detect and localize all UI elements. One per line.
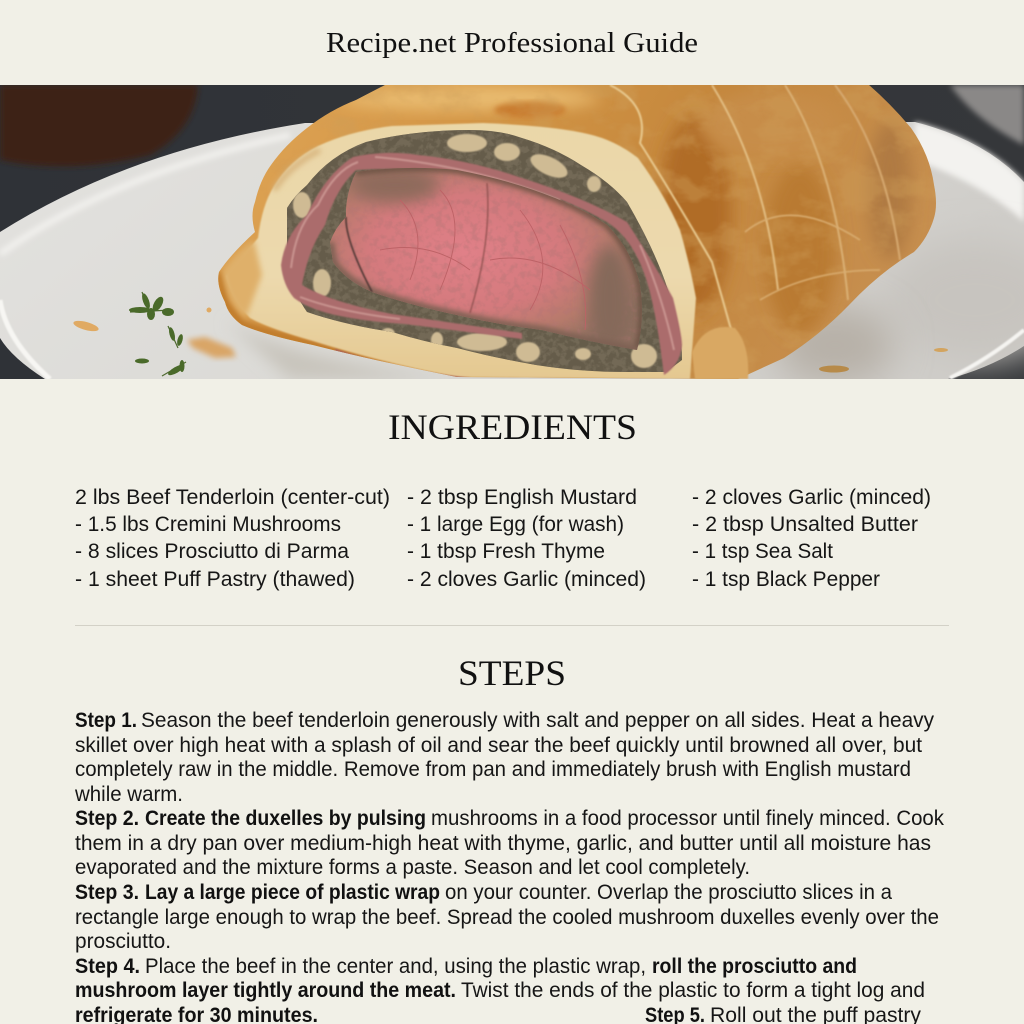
steps heading: STEPS (458, 653, 566, 693)
title: Recipe.net Professional Guide (326, 27, 698, 59)
ingredients column 2: - 1 tbsp Fresh Thyme (407, 540, 605, 563)
ingredients heading: INGREDIENTS (388, 407, 637, 447)
step 1 (74, 709, 934, 806)
ingredients column 3: - 2 cloves Garlic (minced) (692, 486, 931, 509)
step 2 (75, 807, 944, 879)
thyme sprigs (129, 292, 186, 377)
step 2: mushrooms in a food processor until finely minced. Cook (431, 807, 944, 830)
ingredients list (75, 486, 931, 591)
ingredients column 3: - 1 tsp Black Pepper (692, 568, 880, 591)
ingredients column 2: - 1 large Egg (for wash) (407, 513, 624, 536)
step 1: Step 1. (75, 709, 137, 732)
dark table background (0, 85, 1024, 379)
step 4: Place the beef in the center and, using the plastic wrap, (145, 955, 646, 978)
steps text block (74, 709, 944, 1024)
ingredients column 2 (407, 486, 646, 591)
step 4: mushroom layer tightly around the meat. (75, 979, 456, 1002)
step 1: while warm. (74, 783, 183, 806)
ingredients column 1: 2 lbs Beef Tenderloin (center-cut) (75, 486, 390, 509)
dark seep line along base (335, 350, 470, 379)
pale arch shading (274, 150, 320, 190)
step 3: on your counter. Overlap the prosciutto slices in a (445, 881, 892, 904)
ingredients column 1 (75, 486, 390, 591)
step 4 (75, 955, 925, 1024)
pastry shadow on plate (244, 332, 398, 379)
hero photo: sliced beef wellington on a white plate (0, 85, 1024, 385)
step 1: skillet over high heat with a splash of oil and sear the beef quickly until browned all over, but (75, 734, 922, 757)
ingredients column 3 (692, 486, 931, 591)
ingredients column 3: - 2 tbsp Unsalted Butter (692, 513, 918, 536)
step 2: Create the duxelles by pulsing (145, 807, 426, 830)
pastry crumbs (72, 308, 948, 372)
beef tenderloin slice (325, 165, 645, 355)
step 4: Step 4. (75, 955, 140, 978)
ingredients column 1: - 1 sheet Puff Pastry (thawed) (75, 568, 355, 591)
step 2: Step 2. (75, 807, 139, 830)
prosciutto wrap (281, 153, 682, 375)
golden shading at left tip (222, 240, 262, 318)
step 3: rectangle large enough to wrap the beef. Spread the cooled mushroom duxelles evenly over the (75, 906, 939, 929)
ingredients column 3: - 1 tsp Sea Salt (692, 540, 833, 563)
mushroom duxelles layer (280, 125, 690, 380)
plate (0, 122, 1024, 385)
cut face dough (222, 123, 696, 379)
ingredients column 2: - 2 cloves Garlic (minced) (407, 568, 646, 591)
ingredients column 2: - 2 tbsp English Mustard (407, 486, 637, 509)
ingredients column 1: - 8 slices Prosciutto di Parma (75, 540, 349, 563)
step 3 (75, 881, 939, 953)
flaky crust at lower right of cut (692, 327, 748, 379)
step 1: Season the beef tenderloin generously with salt and pepper on all sides. Heat a heavy (141, 709, 934, 732)
step 4: Twist the ends of the plastic to form a tight log and (461, 979, 925, 1002)
mushroom pieces (293, 134, 657, 368)
step 2: evaporated and the mixture forms a paste. Season and let cool completely. (75, 856, 750, 879)
step 3: prosciutto. (75, 930, 171, 953)
step 1: completely raw in the middle. Remove from pan and immediately brush with English mustard (75, 758, 911, 781)
pastry crust (210, 85, 950, 379)
blurred wooden bowl (0, 85, 198, 166)
step 4: roll the prosciutto and (652, 955, 857, 978)
ingredients column 1: - 1.5 lbs Cremini Mushrooms (75, 513, 341, 536)
step 2: them in a dry pan over medium-high heat with thyme, garlic, and butter until all moisture has (75, 832, 931, 855)
step 3: Step 3. (75, 881, 139, 904)
step 3: Lay a large piece of plastic wrap (145, 881, 440, 904)
blurred glass top right (950, 85, 1024, 145)
